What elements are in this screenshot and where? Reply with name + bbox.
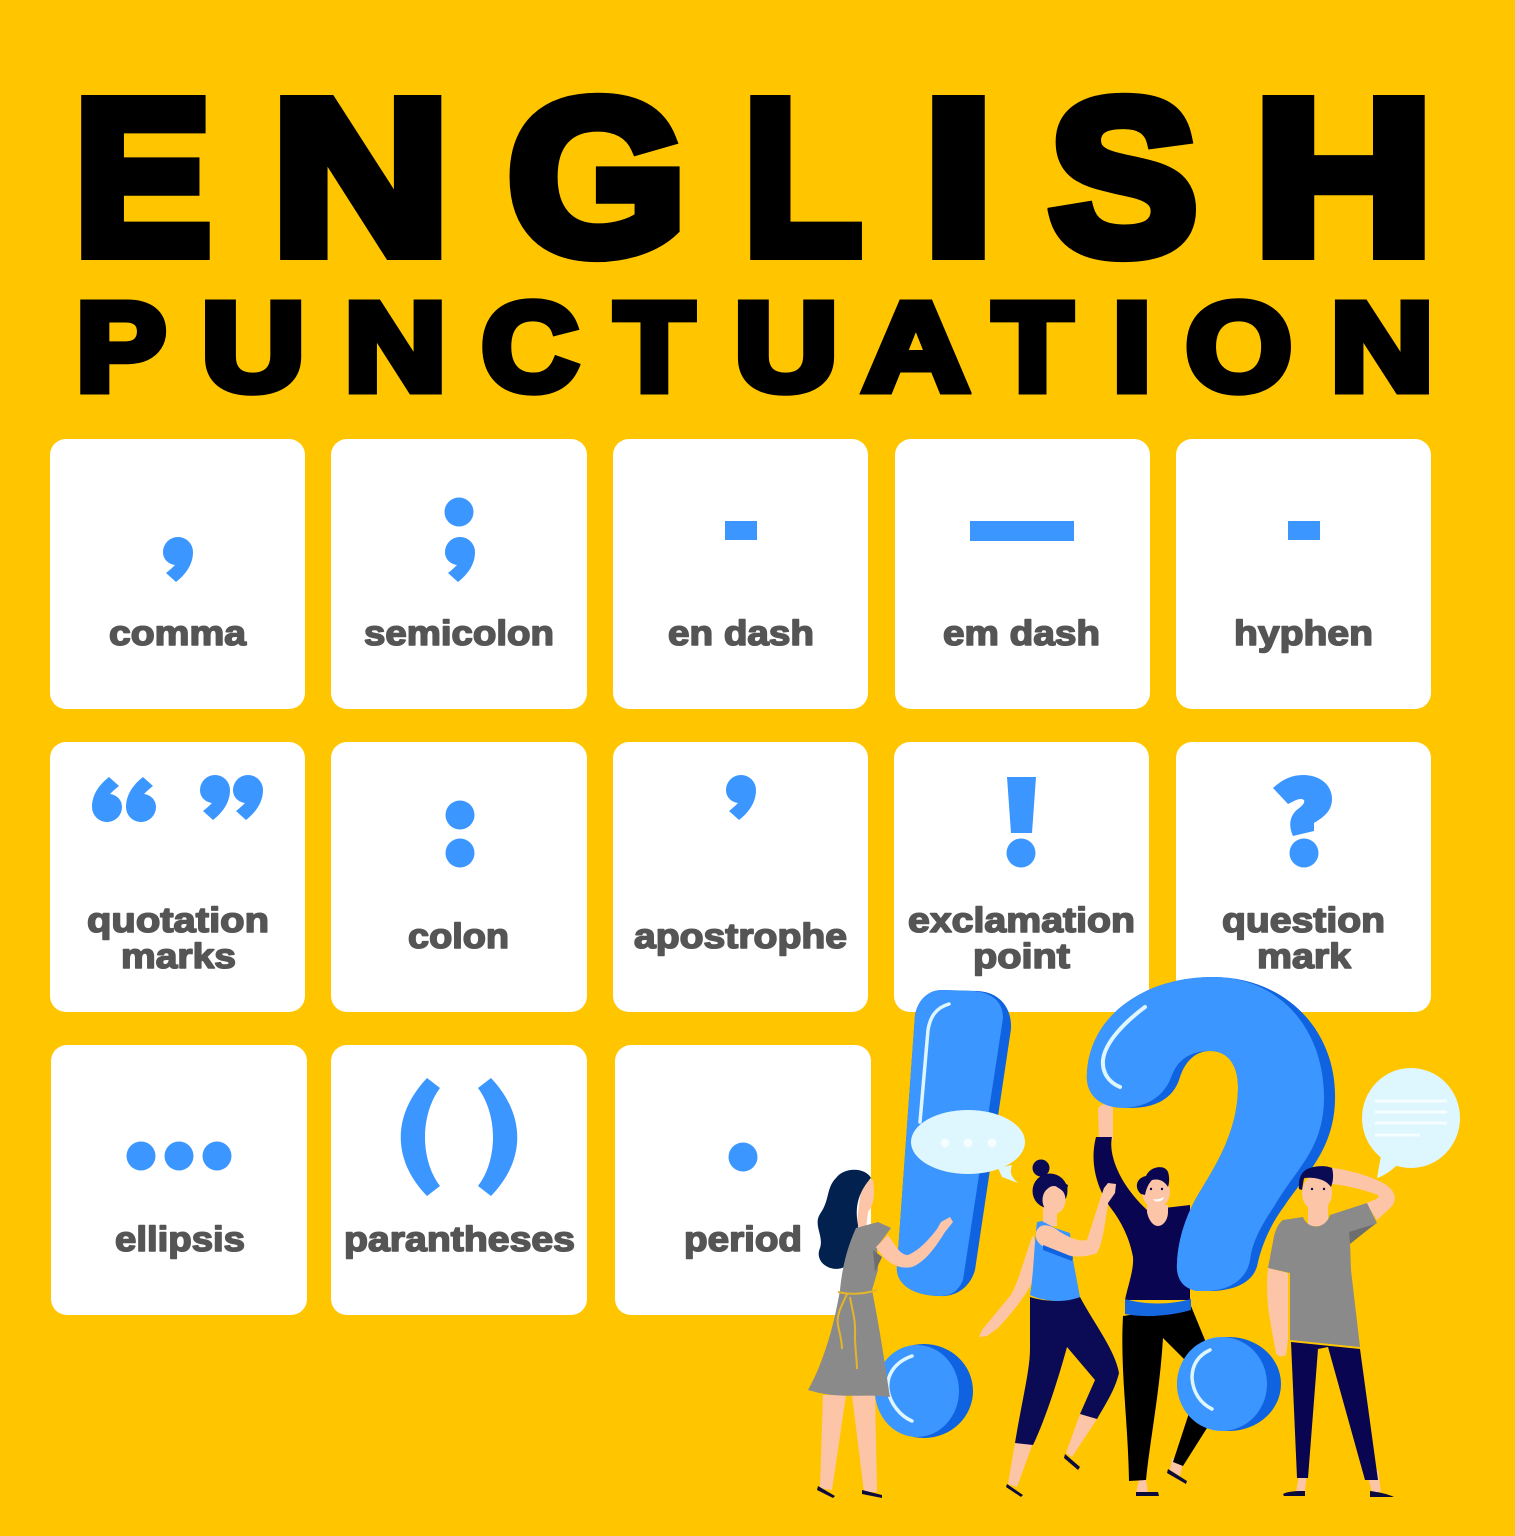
label: question mark (1222, 901, 1385, 976)
label: quotation marks (87, 901, 269, 976)
title: PUNCTUATION: A (863, 278, 969, 417)
icon: comma (163, 537, 193, 582)
label: em dash: em dash (943, 614, 1100, 653)
illustration: people with giant punctuation (808, 977, 1460, 1498)
person: man in gray shirt scratching head (1267, 1166, 1395, 1497)
card: apostrophe (613, 742, 868, 1012)
title: PUNCTUATION (76, 278, 1434, 417)
label: exclamation point: point (973, 937, 1070, 976)
title: PUNCTUATION: O (1186, 278, 1292, 417)
label: hyphen: hyphen (1234, 614, 1373, 653)
card: quotation marks (50, 742, 305, 1012)
label: en dash: en dash (668, 614, 814, 653)
person: man holding question mark, upper body (1094, 1104, 1191, 1316)
card: ellipsis (51, 1045, 307, 1315)
big exclamation mark dot (875, 1344, 973, 1438)
title: PUNCTUATION: P (76, 278, 166, 417)
card: period (615, 1045, 871, 1315)
title: ENGLISH: E (74, 54, 211, 300)
icon: semicolon (444, 498, 475, 582)
card: em dash (895, 439, 1150, 709)
icon: question mark (1273, 775, 1332, 868)
card: en dash (613, 439, 868, 709)
label: quotation marks: quotation (87, 901, 269, 940)
card: hyphen (1176, 439, 1431, 709)
big question mark dot (1177, 1337, 1281, 1431)
label: comma: comma (109, 614, 247, 653)
label: apostrophe: apostrophe (634, 917, 847, 956)
icon: em dash (970, 521, 1074, 541)
icon: en dash (725, 521, 757, 540)
title: PUNCTUATION: T (993, 278, 1072, 417)
icon: exclamation point (1006, 777, 1036, 868)
card: comma (50, 439, 305, 709)
person: woman in gray dress (808, 1170, 953, 1498)
title: ENGLISH: H (1254, 54, 1433, 300)
icon: apostrophe (726, 775, 756, 820)
label: quotation marks: marks (121, 937, 236, 976)
title: PUNCTUATION: C (482, 278, 578, 417)
title: ENGLISH: S (1049, 54, 1198, 300)
person: man holding question mark, lower body (1122, 1306, 1207, 1496)
label: exclamation point (908, 901, 1135, 976)
icon: colon (446, 800, 474, 868)
icon: parentheses (401, 1078, 517, 1196)
label: parantheses: parantheses (344, 1220, 575, 1259)
card: parantheses (331, 1045, 587, 1315)
card: exclamation point (894, 742, 1149, 1012)
title: ENGLISH: N (272, 54, 450, 300)
title: ENGLISH: L (743, 54, 862, 300)
title: ENGLISH: G (507, 54, 686, 300)
label: semicolon: semicolon (364, 614, 554, 653)
big exclamation mark bar (897, 990, 1011, 1296)
title: PUNCTUATION: U (734, 278, 838, 417)
title: PUNCTUATION: T (615, 278, 694, 417)
card: semicolon (331, 439, 587, 709)
title: PUNCTUATION: N (1331, 278, 1434, 417)
label: question mark: mark (1257, 937, 1352, 976)
title: ENGLISH: I (923, 54, 994, 300)
label: ellipsis: ellipsis (115, 1220, 245, 1259)
label: colon: colon (408, 917, 509, 956)
person: woman in blue top (979, 1160, 1119, 1497)
speech bubble with lines (1362, 1068, 1460, 1178)
icon: quotation marks (92, 775, 263, 822)
card: question mark (1176, 742, 1431, 1012)
card: colon (331, 742, 587, 1012)
big question mark (1087, 977, 1335, 1291)
icon: period (728, 1142, 758, 1172)
label: exclamation point: exclamation (908, 901, 1135, 940)
title: ENGLISH (74, 54, 1433, 300)
title: PUNCTUATION: U (202, 278, 305, 417)
speech bubble with dots (911, 1110, 1025, 1183)
icon: hyphen (1288, 521, 1320, 540)
title: PUNCTUATION: N (344, 278, 446, 417)
icon: ellipsis (126, 1142, 232, 1170)
title: PUNCTUATION: I (1113, 278, 1151, 417)
label: question mark: question (1222, 901, 1385, 940)
label: period: period (684, 1220, 802, 1259)
